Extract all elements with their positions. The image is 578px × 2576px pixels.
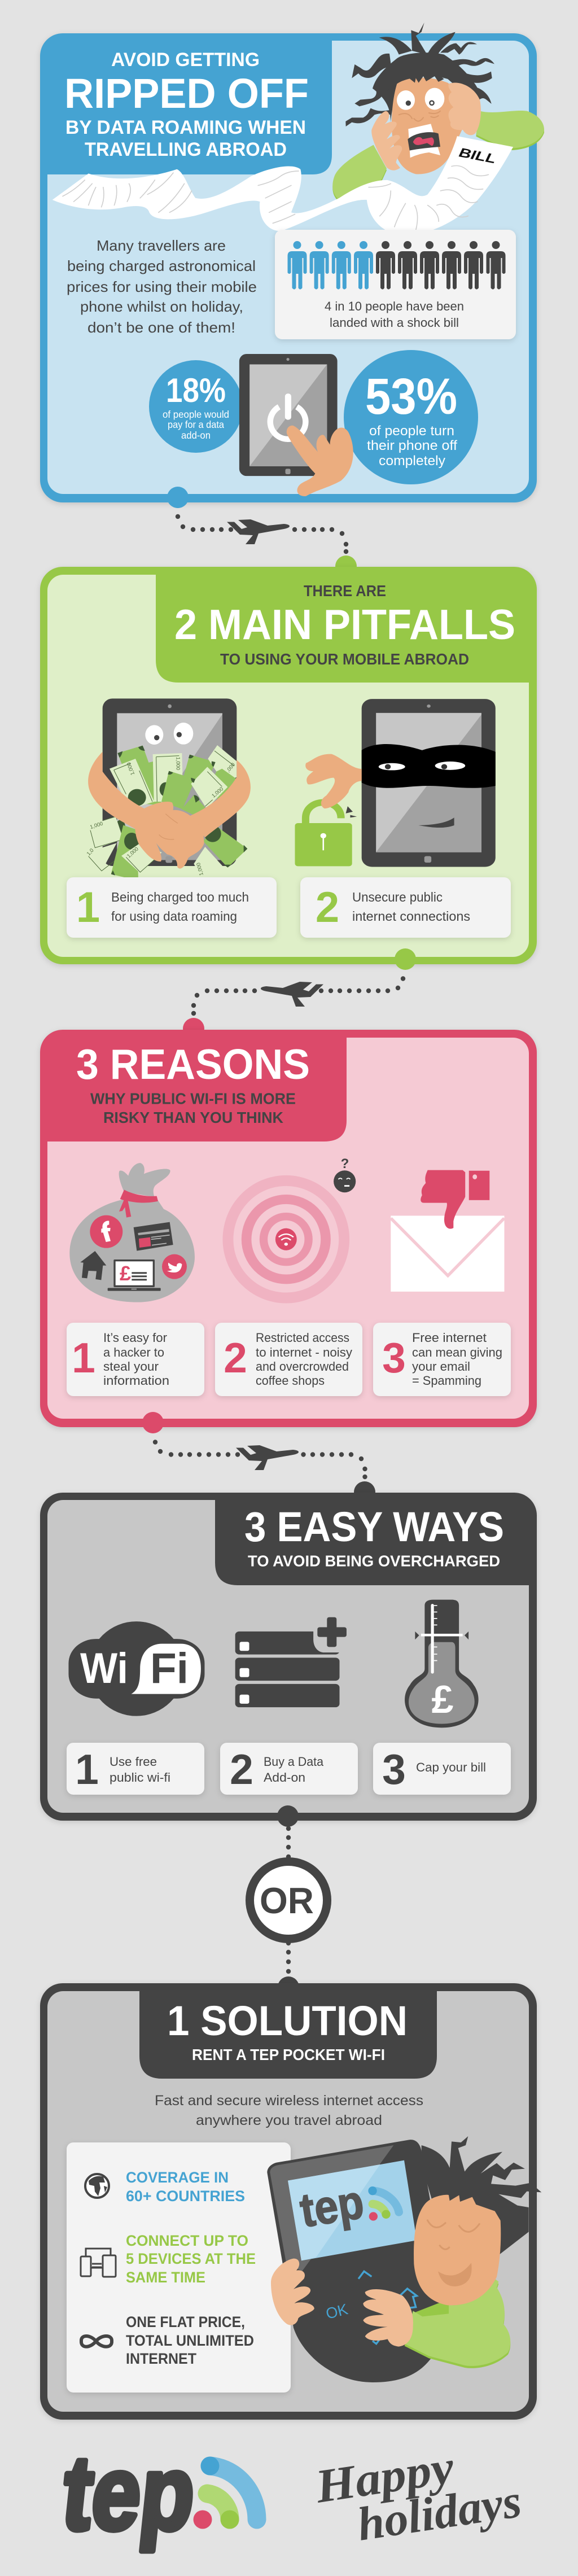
text: connect devices: CONNECT UP TO: [126, 2232, 248, 2249]
card: reason 1: a hacker to: [103, 1345, 164, 1359]
text: connect devices: 5 DEVICES AT THE: [126, 2250, 256, 2267]
text block: description: anywhere you travel abroad: [196, 2113, 382, 2128]
text: flat price: [126, 2313, 254, 2367]
heading: avoid getting ripped off: RIPPED OFF: [64, 70, 309, 117]
card: pitfall 1: for using data roaming: [111, 909, 237, 924]
card: reason 1: It’s easy for: [103, 1331, 167, 1345]
heading: 3 reasons: [76, 1040, 310, 1126]
heading: 2 main pitfalls: TO USING YOUR MOBILE ABROAD: [220, 650, 469, 668]
panel: 1 solution: [40, 1976, 541, 2420]
card: way 2: [220, 1743, 358, 1795]
slogan: happy holidays: [312, 2441, 525, 2551]
text: flat price: ONE FLAT PRICE,: [126, 2313, 245, 2330]
illustration: tablet hoarding money: 1,000: [195, 862, 204, 876]
text block: intro: Many travellers are: [97, 237, 226, 254]
flight path 1 with plane: [176, 514, 348, 554]
illustration: tablet hoarding money: 1,000: [126, 762, 135, 776]
stat: 53%: [344, 350, 478, 484]
text block: intro: phone whilst on holiday,: [80, 298, 243, 315]
stat: 18%: of people would: [163, 409, 229, 420]
card: reason 1: information: [103, 1374, 169, 1388]
text: connect devices: [126, 2232, 256, 2286]
stat: 18%: [149, 360, 243, 453]
slogan: happy holidays: holidays: [354, 2475, 525, 2551]
card: pitfall 1: Being charged too much: [111, 890, 249, 904]
heading: avoid getting ripped off: TRAVELLING ABROAD: [85, 139, 287, 160]
illustration: tablet hoarding money: [86, 698, 251, 881]
card: reason 2: [215, 1323, 362, 1396]
panel: 2 main pitfalls: [40, 556, 537, 970]
illustration: thumbs down on envelope: [391, 1170, 504, 1292]
heading: avoid getting ripped off: [64, 49, 309, 160]
icon: bill cap thermometer: £: [432, 1677, 454, 1721]
heading: avoid getting ripped off: AVOID GETTING: [111, 49, 260, 71]
card: reason 3: = Spamming: [412, 1374, 481, 1388]
badge: or: OR: [260, 1880, 314, 1921]
illustration: tablet hoarding money: 1,000: [211, 786, 224, 799]
stat: 53%: of people turn: [369, 423, 454, 439]
illustration: tablet hoarding money: 1,000: [89, 821, 103, 830]
heading: 1 solution: RENT A TEP POCKET WI-FI: [192, 2046, 385, 2063]
card: way 2: 2: [230, 1746, 253, 1793]
icon: plane: [227, 519, 290, 544]
illustration: long paper bill: [52, 136, 513, 236]
heading: 2 main pitfalls: [174, 582, 515, 668]
card: 4 in 10 people: [275, 230, 516, 339]
heading: 3 reasons: 3 REASONS: [76, 1040, 310, 1088]
card: way 3: Cap your bill: [416, 1760, 486, 1774]
card: reason 1: [67, 1323, 204, 1396]
icon: plane: [261, 982, 323, 1007]
card: pitfall 2: internet connections: [352, 909, 470, 924]
card: pitfall 1: [67, 877, 277, 938]
text block: intro: prices for using their mobile: [67, 278, 257, 295]
text: flat price: TOTAL UNLIMITED: [126, 2332, 254, 2349]
pictogram: ten people: [288, 241, 506, 289]
badge: or: [249, 1862, 327, 1939]
heading: 3 reasons: RISKY THAN YOU THINK: [103, 1109, 283, 1126]
icon: wi-fi logo: Wi: [80, 1645, 128, 1692]
illustration: weak wi-fi signal target: [222, 1170, 356, 1303]
card: reason 1: 1: [72, 1334, 95, 1381]
card: reason 2: coffee shops: [256, 1374, 325, 1388]
illustration: sack of personal data: [69, 1163, 195, 1302]
illustration: tablet hoarding money: 1,0: [86, 847, 95, 856]
text: coverage: COVERAGE IN: [126, 2169, 229, 2186]
text: question mark: ?: [341, 1156, 349, 1171]
card: pitfall 1: 1: [76, 884, 100, 931]
device ok label: OK: [324, 2301, 349, 2323]
connector node: panel 1 bottom: [167, 487, 189, 508]
icon: tablet with power button and pointing hand: [239, 354, 353, 496]
stat: 18%: add-on: [181, 430, 211, 441]
stat: 53%: their phone off: [367, 438, 457, 453]
card: reason 3: 3: [382, 1334, 406, 1381]
stat: 18%: pay for a data: [168, 419, 224, 430]
heading: 2 main pitfalls: 2 MAIN PITFALLS: [174, 601, 515, 648]
icon: devices: [81, 2249, 116, 2277]
icon: globe: [85, 2174, 109, 2198]
card: reason 3: Free internet: [412, 1331, 487, 1345]
card: way 2: Add-on: [264, 1770, 305, 1785]
flight path 3 with plane: [153, 1440, 367, 1479]
icon: wi-fi arcs: [193, 2457, 257, 2529]
card: pitfall 2: [300, 877, 511, 938]
stat: 53%: completely: [379, 453, 445, 469]
text block: intro: being charged astronomical: [67, 257, 256, 274]
card: reason 1: steal your: [103, 1359, 159, 1374]
panel: 3 easy ways: [40, 1481, 537, 1827]
card: reason 2: 2: [224, 1334, 247, 1381]
flight path 2 with plane: [191, 976, 405, 1016]
stat: 18%: 18%: [166, 371, 226, 409]
card: reason 2: to internet - noisy: [256, 1345, 352, 1359]
card: reason 3: your email: [412, 1359, 470, 1374]
text: pound sign on laptop: £: [120, 1262, 131, 1285]
heading: 3 easy ways: [244, 1503, 504, 1569]
heading: avoid getting ripped off: BY DATA ROAMING WHEN: [65, 117, 306, 138]
heading: 1 solution: 1 SOLUTION: [167, 1997, 408, 2044]
card: way 2: Buy a Data: [264, 1755, 324, 1769]
card: way 1: [67, 1743, 204, 1795]
stat: 53%: 53%: [365, 369, 457, 425]
panel: avoid getting ripped off: [40, 23, 544, 508]
card: reason 3: [373, 1323, 511, 1396]
illustration: shocked man holding bill: [52, 23, 544, 236]
card: reason 2: Restricted access: [256, 1331, 349, 1345]
bill label: BILL: [458, 145, 497, 167]
device logo text: tep: [296, 2175, 367, 2237]
card: reason 2: and overcrowded: [256, 1359, 349, 1374]
icon: wi-fi logo: Fi: [150, 1645, 189, 1692]
illustration: thief tablet stealing padlock: [295, 699, 496, 867]
card: way 1: Use free: [110, 1755, 157, 1769]
text block: intro: don’t be one of them!: [87, 319, 235, 336]
text block: description: [155, 2093, 423, 2128]
card: benefits: [67, 2142, 291, 2393]
heading: 2 main pitfalls: THERE ARE: [304, 582, 386, 600]
card: way 1: public wi-fi: [110, 1770, 170, 1785]
dotted connector with OR badge: [249, 1826, 327, 1974]
heading: 1 solution: [167, 1997, 408, 2063]
text: flat price: INTERNET: [126, 2350, 196, 2367]
text block: intro: [67, 237, 257, 336]
text: coverage: [126, 2169, 245, 2205]
card: way 3: 3: [382, 1746, 406, 1793]
card caption: landed with a shock bill: [330, 316, 459, 330]
icon: wi-fi logo: [68, 1621, 204, 1716]
card: reason 3: can mean giving: [412, 1345, 502, 1359]
illustration: tablet hoarding money: 1,000: [176, 757, 181, 770]
slogan: happy holidays: Happy: [312, 2441, 458, 2513]
card: pitfall 2: 2: [316, 884, 339, 931]
heading: 3 easy ways: TO AVOID BEING OVERCHARGED: [248, 1552, 500, 1569]
icon: bill cap thermometer: [405, 1600, 479, 1727]
text: coverage: 60+ COUNTRIES: [126, 2188, 245, 2205]
illustration: relaxed man hugging pocket wi-fi: [267, 2136, 541, 2382]
card: way 3: [373, 1743, 511, 1795]
card caption: 4 in 10 people have been: [325, 299, 464, 313]
illustration: tablet hoarding money: 1,000: [126, 846, 139, 859]
text: connect devices: SAME TIME: [126, 2269, 205, 2286]
heading: 3 easy ways: 3 EASY WAYS: [244, 1503, 504, 1550]
icon: data add-on stack: [235, 1617, 347, 1707]
text block: description: Fast and secure wireless internet access: [155, 2093, 423, 2109]
panel: 3 reasons: [40, 1018, 537, 1433]
illustration: tablet hoarding money: ,000: [225, 762, 236, 773]
card: pitfall 2: Unsecure public: [352, 890, 443, 904]
logo: tep: tep: [58, 2434, 201, 2552]
heading: 3 reasons: WHY PUBLIC WI-FI IS MORE: [90, 1090, 296, 1108]
card: way 1: 1: [75, 1746, 99, 1793]
icon: infinity: [81, 2336, 112, 2347]
card caption: [325, 299, 464, 330]
icon: plane: [236, 1445, 299, 1470]
